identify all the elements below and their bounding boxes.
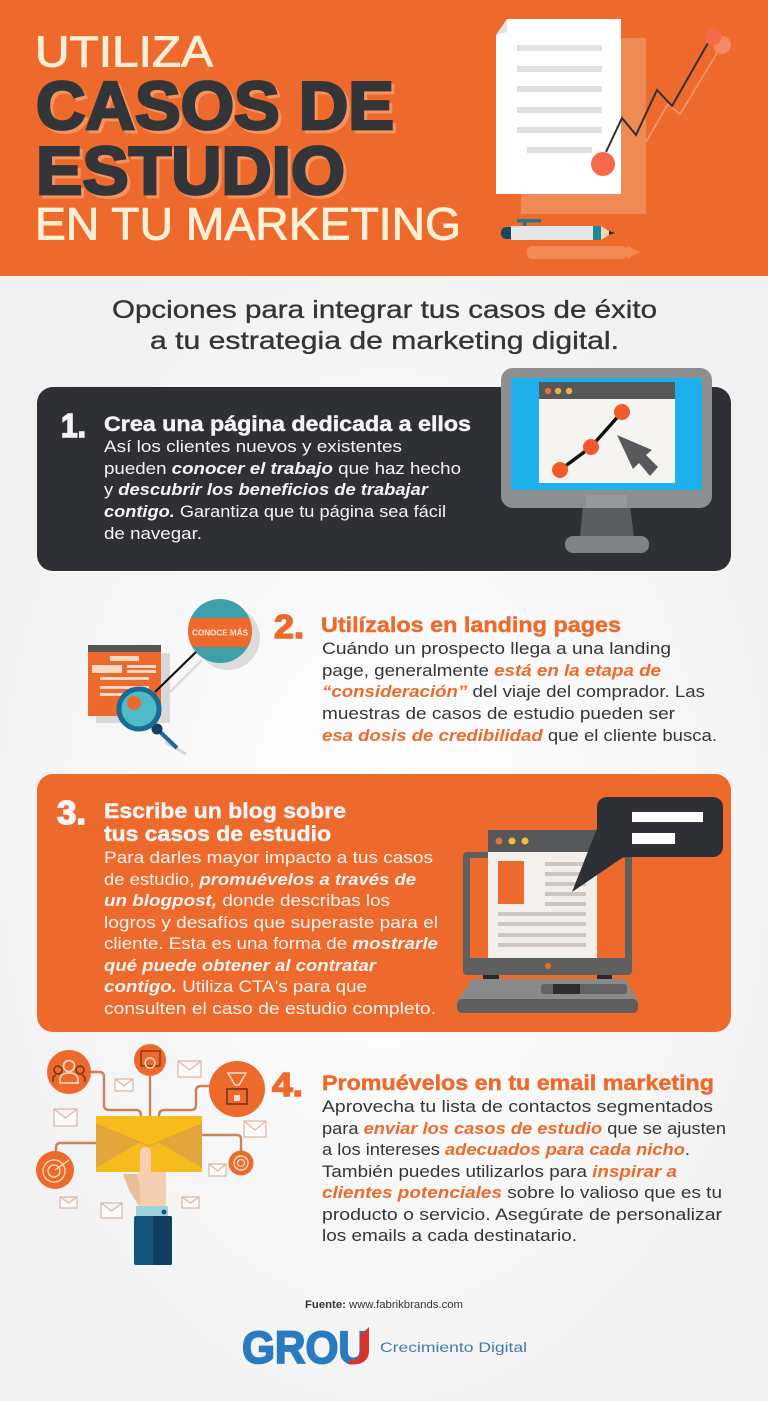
- header banner: [0, 0, 768, 276]
- icon: laptop with blog post: [457, 797, 723, 1013]
- title: ESTUDIO: [39, 136, 348, 212]
- speech bubble: [572, 797, 723, 892]
- intro heading: [112, 296, 657, 355]
- text: step 4: los emails a cada destinatario.: [322, 1226, 577, 1245]
- title: UTILIZA: [35, 28, 214, 76]
- icon circle: browser: [134, 1044, 166, 1076]
- text: step 1: pueden conocer el trabajo que haz hecho: [104, 459, 461, 478]
- title: [35, 28, 461, 250]
- text: step 3: Para darles mayor impacto a tus casos: [104, 848, 433, 867]
- title: CASOS DE: [39, 71, 397, 147]
- text: step 2: Cuándo un prospecto llega a una landing: [322, 639, 671, 658]
- icon circle: funnel: [209, 1061, 265, 1117]
- text: step 3: logros y desafíos que superaste para el: [104, 913, 438, 932]
- intro heading: a tu estrategia de marketing digital.: [150, 327, 619, 355]
- hand with sleeve: [123, 1172, 172, 1265]
- title: CASOS DE: [36, 68, 394, 144]
- title: ESTUDIO: [36, 133, 345, 209]
- intro heading: Opciones para integrar tus casos de éxito: [112, 296, 657, 324]
- text: step 1: y descubrir los beneficios de trabajar: [104, 480, 429, 499]
- icon circle: target: [36, 1151, 74, 1189]
- heading: step 3: [104, 800, 346, 846]
- text: step 3: [104, 848, 438, 1018]
- text: step 3: qué puede obtener al contratar: [104, 956, 377, 975]
- text: step 2: “consideración” del viaje del comprador. Las: [322, 682, 705, 701]
- panel: step 3: [37, 774, 731, 1032]
- text: step 4: También puedes utilizarlos para inspirar a: [322, 1162, 677, 1181]
- number 4: 4.: [272, 1066, 303, 1103]
- logo: [242, 1322, 527, 1373]
- text: step 4: [322, 1097, 726, 1245]
- text: step 2: [322, 639, 717, 745]
- icon circle: gear: [228, 1150, 254, 1176]
- source: Fuente: www.fabrikbrands.com: [305, 1299, 463, 1311]
- text: step 1: Así los clientes nuevos y existentes: [104, 437, 402, 456]
- text: step 3: contigo. Utiliza CTA's para que: [104, 977, 367, 996]
- text: step 3: cliente. Esta es una forma de mostrarle: [104, 934, 438, 953]
- icon circle: people: [47, 1050, 91, 1094]
- icon: document with growth line: [496, 19, 731, 214]
- text: step 4: a los intereses adecuados para cada nicho .: [322, 1140, 690, 1159]
- heading: step 3: tus casos de estudio: [104, 823, 331, 846]
- heading: step 1: Crea una página dedicada a ellos: [104, 413, 471, 436]
- logo: Crecimiento Digital: [380, 1340, 527, 1355]
- text: step 2: page, generalmente está en la etapa de: [322, 661, 661, 680]
- main envelope: [96, 1116, 202, 1176]
- step 2 block: [274, 608, 717, 745]
- icon: magnifier and call to action: CONOCE MÁS: [192, 626, 248, 638]
- connectors: [56, 1072, 241, 1153]
- text: step 2: muestras de casos de estudio pueden ser: [322, 704, 675, 723]
- text: step 1: de navegar.: [104, 524, 202, 543]
- icon: magnifier and call to action: [88, 599, 260, 754]
- logo: GROU: [242, 1322, 369, 1373]
- number 2: 2.: [274, 608, 304, 645]
- text: step 4: clientes potenciales sobre lo valioso que es tu: [322, 1183, 722, 1202]
- icon: email network: [36, 1044, 266, 1265]
- small envelopes: [54, 1061, 266, 1218]
- text: step 2: esa dosis de credibilidad que el cliente busca.: [322, 726, 717, 745]
- text: step 1: [104, 437, 461, 543]
- number 3: 3.: [57, 794, 86, 831]
- panel: step 1: [37, 368, 731, 571]
- title: EN TU MARKETING: [35, 198, 461, 250]
- heading: step 2: Utilízalos en landing pages: [321, 614, 621, 637]
- heading: step 4: Promuévelos en tu email marketing: [322, 1072, 714, 1095]
- text: step 1: contigo. Garantiza que tu página sea fácil: [104, 502, 446, 521]
- text: step 4: para enviar los casos de estudio que se ajusten: [322, 1119, 726, 1138]
- text: step 4: producto o servicio. Asegúrate de personalizar: [322, 1205, 722, 1224]
- heading: step 3: Escribe un blog sobre: [104, 800, 346, 823]
- text: step 3: un blogpost, donde describas los: [104, 891, 390, 910]
- text: step 3: consulten el caso de estudio completo.: [104, 999, 436, 1018]
- icon: monitor: [501, 368, 712, 553]
- number 1: 1.: [61, 407, 86, 444]
- icon: pen: [501, 219, 640, 259]
- text: step 4: Aprovecha tu lista de contactos segmentados: [322, 1097, 713, 1116]
- step 4 block: [272, 1066, 726, 1245]
- text: step 3: de estudio, promuévelos a través de: [104, 870, 416, 889]
